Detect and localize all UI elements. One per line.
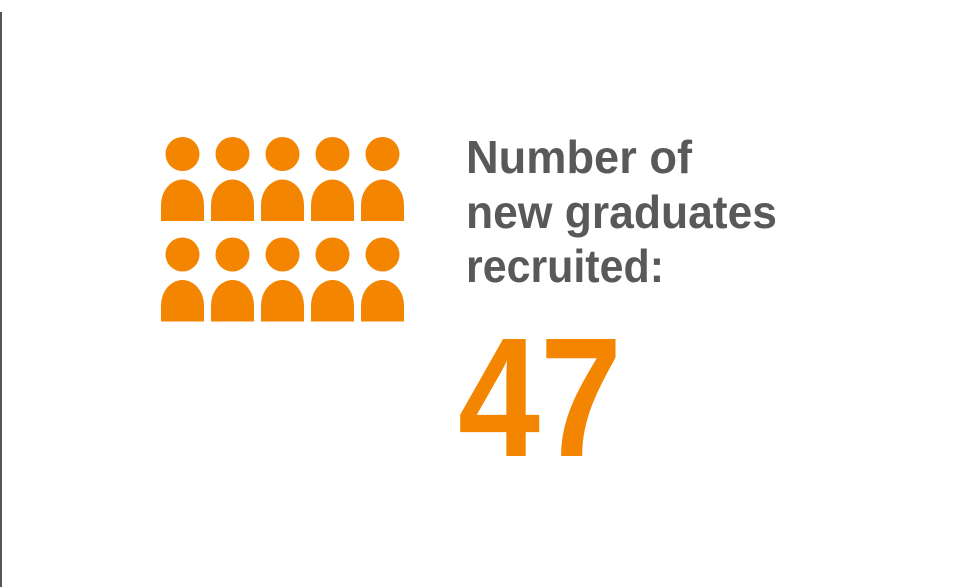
- icon: group of people: [161, 137, 404, 322]
- heading: number of new graduates recruited: recruited:: [466, 240, 664, 292]
- heading: number of new graduates recruited: new graduates: [466, 186, 777, 238]
- heading: number of new graduates recruited: Number of: [466, 131, 693, 183]
- heading: number of new graduates recruited: [466, 131, 777, 292]
- value: 47: 47: [458, 303, 622, 493]
- left vertical rule: [0, 12, 2, 587]
